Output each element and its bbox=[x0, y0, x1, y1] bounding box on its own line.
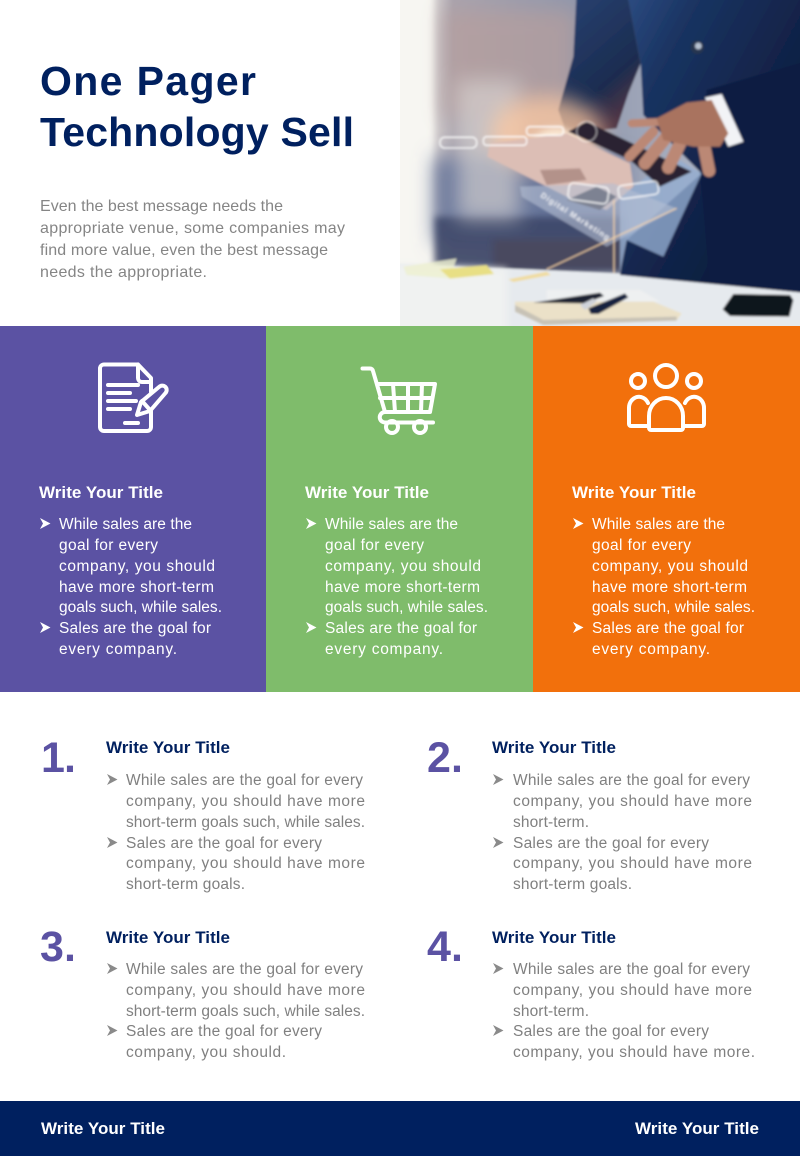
footer bar: Write Your Title bbox=[635, 1119, 759, 1138]
orange list bbox=[573, 516, 755, 658]
item 4: 4. bbox=[427, 923, 463, 971]
item 1 bbox=[41, 734, 365, 893]
item 3: company, you should have more bbox=[126, 982, 365, 999]
photo hand bbox=[629, 122, 709, 171]
item 3: Sales are the goal for every bbox=[126, 1023, 322, 1040]
item 3 bbox=[40, 923, 365, 1061]
photo suit button bbox=[691, 41, 704, 54]
photo sticky notes bbox=[403, 258, 457, 278]
item 4: Sales are the goal for every bbox=[513, 1023, 709, 1040]
item 2: Sales are the goal for every bbox=[513, 835, 709, 852]
orange list: goals such, while sales. bbox=[592, 599, 755, 616]
photo smartphone bbox=[723, 294, 793, 317]
title: One Pager bbox=[40, 58, 256, 104]
panel: purple bbox=[0, 326, 266, 692]
purple list: Sales are the goal for bbox=[59, 620, 211, 637]
item 3: short-term goals such, while sales. bbox=[126, 1003, 365, 1020]
item 2: company, you should have more bbox=[513, 793, 752, 810]
green list: company, you should bbox=[325, 558, 481, 575]
photo shirt cuff bbox=[705, 94, 743, 147]
purple list: goals such, while sales. bbox=[59, 599, 222, 616]
purple list: While sales are the bbox=[59, 516, 192, 533]
icon: shopping cart bbox=[362, 368, 435, 433]
item 1: Write Your Title bbox=[106, 738, 230, 757]
purple list: company, you should bbox=[59, 558, 215, 575]
photo light flare bbox=[490, 97, 603, 170]
orange title: Write Your Title bbox=[572, 483, 696, 502]
item 1: Sales are the goal for every bbox=[126, 835, 322, 852]
item 2 bbox=[427, 734, 752, 893]
item 2: company, you should have more bbox=[513, 855, 752, 872]
icon: group of people bbox=[629, 365, 704, 430]
photo tablet lower pane bbox=[620, 157, 702, 273]
item 3: 3. bbox=[40, 923, 76, 971]
item 3: company, you should. bbox=[126, 1044, 286, 1061]
intro text block: needs the appropriate. bbox=[40, 264, 207, 281]
item 4: short-term. bbox=[513, 1003, 589, 1020]
photo: businessman touching holographic tablet: Digital Marketing bbox=[539, 191, 612, 243]
photo tablet bbox=[568, 122, 692, 187]
item 1: 1. bbox=[41, 734, 76, 782]
title bbox=[40, 58, 354, 155]
photo pens bbox=[533, 293, 604, 303]
green list: While sales are the bbox=[325, 516, 458, 533]
orange list: While sales are the bbox=[592, 516, 725, 533]
intro text block bbox=[40, 198, 345, 281]
green list: goal for every bbox=[325, 537, 424, 554]
item 1: company, you should have more bbox=[126, 793, 365, 810]
intro text block: find more value, even the best message bbox=[40, 242, 328, 259]
orange list: company, you should bbox=[592, 558, 748, 575]
purple list bbox=[40, 516, 222, 658]
green title: Write Your Title bbox=[305, 483, 429, 502]
item 4: While sales are the goal for every bbox=[513, 961, 750, 978]
item 2: 2. bbox=[427, 734, 463, 782]
intro text block: appropriate venue, some companies may bbox=[40, 220, 345, 237]
orange list: Sales are the goal for bbox=[592, 620, 744, 637]
icon: document with pen bbox=[100, 364, 167, 431]
item 3: Write Your Title bbox=[106, 928, 230, 947]
photo suit body bbox=[620, 0, 800, 293]
footer bar: Write Your Title bbox=[41, 1119, 165, 1138]
panel: orange bbox=[533, 326, 800, 692]
orange list: have more short-term bbox=[592, 579, 747, 596]
photo left arm bbox=[558, 0, 641, 133]
item 2: short-term goals. bbox=[513, 876, 632, 893]
purple list: have more short-term bbox=[59, 579, 214, 596]
photo: businessman touching holographic tablet bbox=[390, 0, 800, 337]
item 4: Write Your Title bbox=[492, 928, 616, 947]
item 4: company, you should have more bbox=[513, 982, 752, 999]
item 2: While sales are the goal for every bbox=[513, 772, 750, 789]
item 2: short-term. bbox=[513, 814, 589, 831]
intro text block: Even the best message needs the bbox=[40, 198, 283, 215]
item 1: company, you should have more bbox=[126, 855, 365, 872]
item 1: short-term goals such, while sales. bbox=[126, 814, 365, 831]
title: Technology Sell bbox=[40, 109, 354, 155]
item 1: short-term goals. bbox=[126, 876, 245, 893]
orange list: every company. bbox=[592, 641, 710, 658]
purple list: goal for every bbox=[59, 537, 158, 554]
footer bar bbox=[0, 1101, 800, 1156]
green list bbox=[306, 516, 488, 658]
purple title: Write Your Title bbox=[39, 483, 163, 502]
photo table bbox=[452, 264, 800, 326]
photo flare lines bbox=[547, 200, 677, 273]
green list: have more short-term bbox=[325, 579, 480, 596]
panel: green bbox=[266, 326, 534, 692]
photo notebook bbox=[547, 290, 660, 302]
item 1: While sales are the goal for every bbox=[126, 772, 363, 789]
green list: goals such, while sales. bbox=[325, 599, 488, 616]
orange list: goal for every bbox=[592, 537, 691, 554]
purple list: every company. bbox=[59, 641, 177, 658]
green list: Sales are the goal for bbox=[325, 620, 477, 637]
item 4: company, you should have more. bbox=[513, 1044, 755, 1061]
photo holographic pane bbox=[520, 183, 677, 247]
item 3: While sales are the goal for every bbox=[126, 961, 363, 978]
item 2: Write Your Title bbox=[492, 738, 616, 757]
item 4 bbox=[427, 923, 755, 1061]
green list: every company. bbox=[325, 641, 443, 658]
